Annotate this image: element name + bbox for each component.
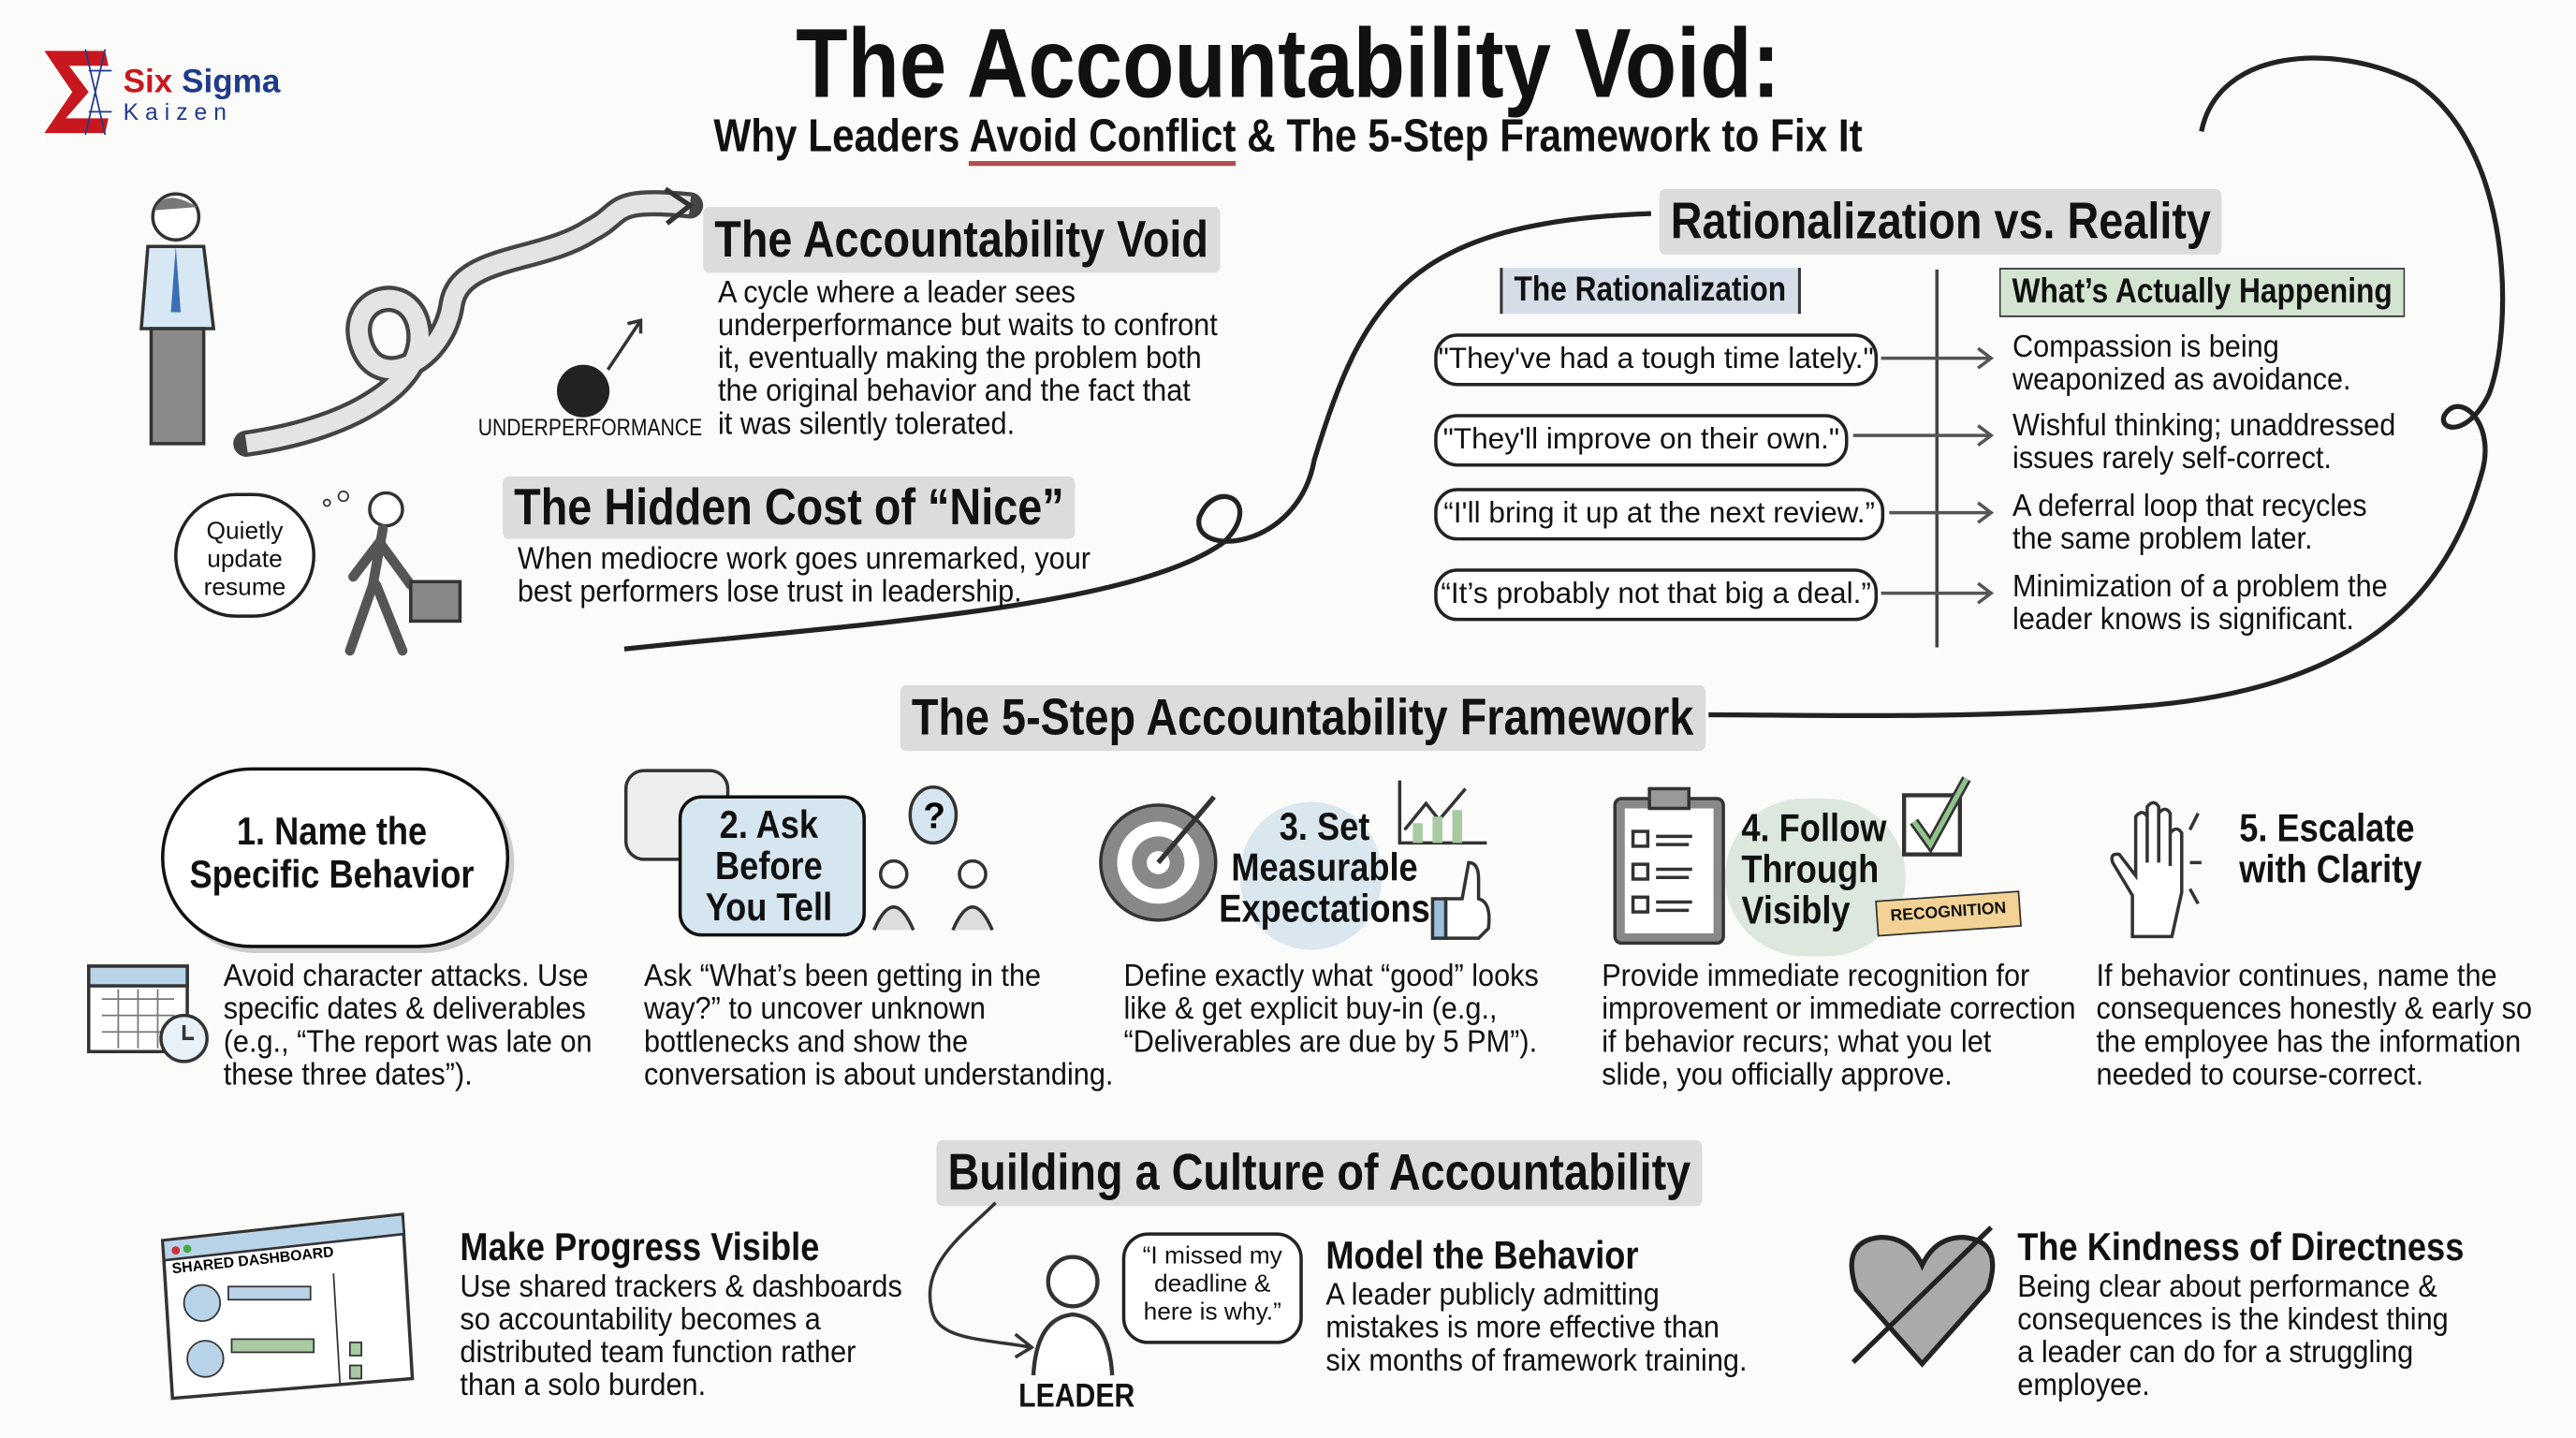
text: kindness of directness: employee. bbox=[2017, 1369, 2150, 1403]
step 1 title: Specific Behavior bbox=[190, 853, 475, 897]
step 5 text bbox=[2097, 960, 2532, 1093]
step 5 title: 5. Escalate bbox=[2239, 807, 2415, 851]
logo bbox=[44, 49, 281, 135]
step 4 title: 4. Follow bbox=[1741, 807, 1886, 851]
icon: shared dashboard bbox=[161, 1212, 414, 1401]
step 2 text: way?” to uncover unknown bbox=[644, 992, 986, 1027]
text: kindness of directness: The Kindness of Directness bbox=[2017, 1225, 2464, 1270]
heading: rationalization vs reality: Rationalization vs. Reality bbox=[1671, 192, 2211, 250]
step 2 title: 2. Ask bbox=[720, 803, 818, 848]
text: kindness of directness: a leader can do for a struggling bbox=[2017, 1336, 2413, 1371]
icon: checkmark bbox=[1902, 776, 1971, 857]
step 2 text: conversation is about understanding. bbox=[644, 1058, 1113, 1093]
panel: rationalization vs reality: the same problem later. bbox=[2012, 522, 2313, 557]
text: hidden cost: best performers lose trust in leadership. bbox=[518, 575, 1022, 609]
step 2 text: Ask “What’s been getting in the bbox=[644, 960, 1041, 994]
step 2 bbox=[623, 769, 1113, 1093]
text: make progress visible: Make Progress Visible bbox=[460, 1225, 819, 1270]
cloud: quietly update resume bbox=[174, 493, 315, 618]
bubbles and arrows: "They'll improve on their own." bbox=[1443, 422, 1839, 455]
step 1 text: specific dates & deliverables bbox=[224, 992, 586, 1027]
text: accountability void bbox=[718, 276, 1218, 442]
step 3 title: Expectations bbox=[1219, 888, 1430, 932]
step 4 bbox=[1602, 776, 2076, 1093]
text: model the behavior: mistakes is more effective than bbox=[1325, 1312, 1720, 1345]
step 3 text: “Deliverables are due by 5 PM”). bbox=[1123, 1025, 1537, 1060]
step 2 title: Before bbox=[715, 844, 823, 889]
icon: clipboard bbox=[1614, 786, 1725, 946]
logo: Kaizen bbox=[124, 98, 233, 125]
bubble: i missed my deadline: here is why.” bbox=[1144, 1299, 1281, 1326]
step 2 text: bottlenecks and show the bbox=[644, 1025, 968, 1060]
step 2 text bbox=[644, 960, 1113, 1093]
text: hidden cost: When mediocre work goes unremarked, your bbox=[518, 542, 1090, 577]
heading: 5-step framework: The 5-Step Accountability Framework bbox=[912, 688, 1693, 746]
step 2 title: You Tell bbox=[706, 886, 832, 930]
step 3 title bbox=[1219, 805, 1430, 932]
cloud: quietly update resume: Quietly bbox=[207, 518, 283, 546]
reality texts: Compassion is being bbox=[2012, 330, 2279, 365]
text: kindness of directness: consequences is the kindest thing bbox=[2017, 1303, 2449, 1338]
text: accountability void: it was silently tolerated. bbox=[718, 407, 1015, 442]
step 5 text: consequences honestly & early so bbox=[2097, 992, 2532, 1027]
bubble: i missed my deadline: deadline & bbox=[1154, 1270, 1270, 1299]
step 5 text: the employee has the information bbox=[2097, 1025, 2521, 1060]
text: make progress visible: Use shared trackers & dashboards bbox=[460, 1270, 902, 1305]
bubbles and arrows: “I'll bring it up at the next review.” bbox=[1443, 496, 1875, 529]
text: kindness of directness bbox=[2017, 1225, 2464, 1403]
subheader: the rationalization: The Rationalization bbox=[1515, 271, 1786, 309]
text: make progress visible bbox=[460, 1225, 902, 1403]
label: underperformance: UNDERPERFORMANCE bbox=[478, 414, 702, 440]
step 3 title: 3. Set bbox=[1280, 805, 1369, 849]
reality texts: weaponized as avoidance. bbox=[2012, 363, 2351, 398]
step 5 text: If behavior continues, name the bbox=[2097, 960, 2497, 994]
text: model the behavior: Model the Behavior bbox=[1325, 1234, 1639, 1278]
step 3 text: like & get explicit buy-in (e.g., bbox=[1123, 992, 1498, 1027]
step 5 title: with Clarity bbox=[2239, 848, 2422, 892]
text: model the behavior: six months of framework training. bbox=[1325, 1344, 1747, 1379]
step 5 text: needed to course-correct. bbox=[2097, 1058, 2423, 1093]
icon: target bbox=[1099, 796, 1217, 922]
icon: cloud bbox=[161, 768, 509, 948]
step 4 text bbox=[1602, 960, 2076, 1093]
text: make progress visible: so accountability becomes a bbox=[460, 1303, 821, 1338]
panel: rationalization vs reality: issues rarely self-correct. bbox=[2012, 442, 2332, 477]
cloud: quietly update resume: resume bbox=[204, 574, 285, 601]
step 4 title: Through bbox=[1741, 848, 1879, 892]
icon: two people with question bbox=[872, 785, 994, 931]
logo: Six Sigma bbox=[124, 64, 280, 100]
step 1 bbox=[87, 768, 593, 1093]
icon: leader bbox=[1018, 1255, 1134, 1415]
subheader: what's actually happening: What’s Actually Happening bbox=[2012, 272, 2393, 311]
panel: rationalization vs reality: A deferral loop that recycles bbox=[2012, 490, 2367, 524]
icon: recognition ribbon bbox=[1875, 890, 2022, 936]
bubble: i missed my deadline: “I missed my bbox=[1143, 1242, 1282, 1270]
text: kindness of directness: Being clear about performance & bbox=[2017, 1270, 2437, 1305]
reality texts bbox=[2012, 330, 2351, 398]
panel: rationalization vs reality: Wishful thinking; unaddressed bbox=[2012, 409, 2395, 444]
step 2 title bbox=[706, 803, 832, 930]
step 4 text: Provide immediate recognition for bbox=[1602, 960, 2029, 994]
bubbles and arrows bbox=[1434, 333, 1994, 622]
text: accountability void: it, eventually making the problem both bbox=[718, 342, 1202, 376]
heading: accountability void: The Accountability Void bbox=[714, 211, 1208, 268]
step 5 bbox=[2097, 801, 2532, 1093]
text: accountability void: the original behavior and the fact that bbox=[718, 374, 1191, 409]
step 4 title bbox=[1741, 807, 1887, 933]
bubbles and arrows: “It’s probably not that big a deal.” bbox=[1441, 577, 1871, 609]
icon: calendar bbox=[87, 964, 209, 1064]
cloud: quietly update resume: update bbox=[207, 546, 283, 574]
heading: hidden cost of nice: The Hidden Cost of “Nice” bbox=[514, 478, 1064, 536]
icon: walking employee bbox=[322, 491, 462, 655]
icon: leader: LEADER bbox=[1018, 1379, 1134, 1415]
bubble: i missed my deadline bbox=[1122, 1232, 1303, 1344]
text: model the behavior: A leader publicly admitting bbox=[1325, 1278, 1660, 1313]
arrow: to leader bbox=[929, 1202, 1035, 1359]
step 1 text: Avoid character attacks. Use bbox=[224, 960, 589, 994]
step 3 text bbox=[1123, 960, 1539, 1060]
panel: rationalization vs reality: Minimization of a problem the bbox=[2012, 570, 2388, 605]
bubbles and arrows: "They've had a tough time lately." bbox=[1439, 342, 1874, 374]
step 3 title: Measurable bbox=[1231, 846, 1418, 890]
text: hidden cost bbox=[518, 542, 1090, 609]
icon: shared dashboard: SHARED DASHBOARD bbox=[171, 1244, 334, 1277]
step 1 title bbox=[190, 810, 475, 897]
icon: chart and thumb bbox=[1398, 781, 1491, 940]
icon: speech bubbles bbox=[624, 769, 729, 861]
icon: recognition ribbon: RECOGNITION bbox=[1890, 900, 2007, 926]
step 1 title: 1. Name the bbox=[237, 810, 427, 855]
text: model the behavior bbox=[1325, 1234, 1747, 1379]
step 1 text: these three dates”). bbox=[224, 1058, 473, 1093]
step 4 text: slide, you officially approve. bbox=[1602, 1058, 1953, 1093]
panel: rationalization vs reality: leader knows is significant. bbox=[2012, 603, 2354, 638]
text: accountability void: underperformance but waits to confront bbox=[718, 309, 1218, 344]
step 4 text: improvement or immediate correction bbox=[1602, 992, 2076, 1027]
subtitle: Why Leaders Avoid Conflict & The 5-Step Framework to Fix It bbox=[713, 110, 1863, 161]
text: accountability void: A cycle where a leader sees bbox=[718, 276, 1076, 311]
illustration: man and winding road bbox=[139, 187, 704, 457]
step 4 text: if behavior recurs; what you let bbox=[1602, 1025, 1991, 1060]
step 3 bbox=[1099, 781, 1539, 1060]
heading: building a culture: Building a Culture of Accountability bbox=[947, 1144, 1690, 1201]
step 1 text bbox=[223, 960, 593, 1093]
icon: crossed heart bbox=[1850, 1225, 1996, 1368]
text: make progress visible: distributed team function rather bbox=[460, 1336, 856, 1371]
icon: raised hand bbox=[2110, 801, 2202, 938]
step 5 title bbox=[2239, 807, 2422, 892]
panel: rationalization vs reality bbox=[1434, 189, 2406, 648]
icon: two people with question: ? bbox=[923, 797, 945, 837]
step 3 text: Define exactly what “good” looks bbox=[1123, 960, 1539, 994]
title: The Accountability Void: bbox=[796, 8, 1780, 118]
step 4 title: Visibly bbox=[1741, 889, 1851, 933]
text: make progress visible: than a solo burden. bbox=[460, 1369, 706, 1403]
step 1 text: (e.g., “The report was late on bbox=[224, 1025, 593, 1060]
